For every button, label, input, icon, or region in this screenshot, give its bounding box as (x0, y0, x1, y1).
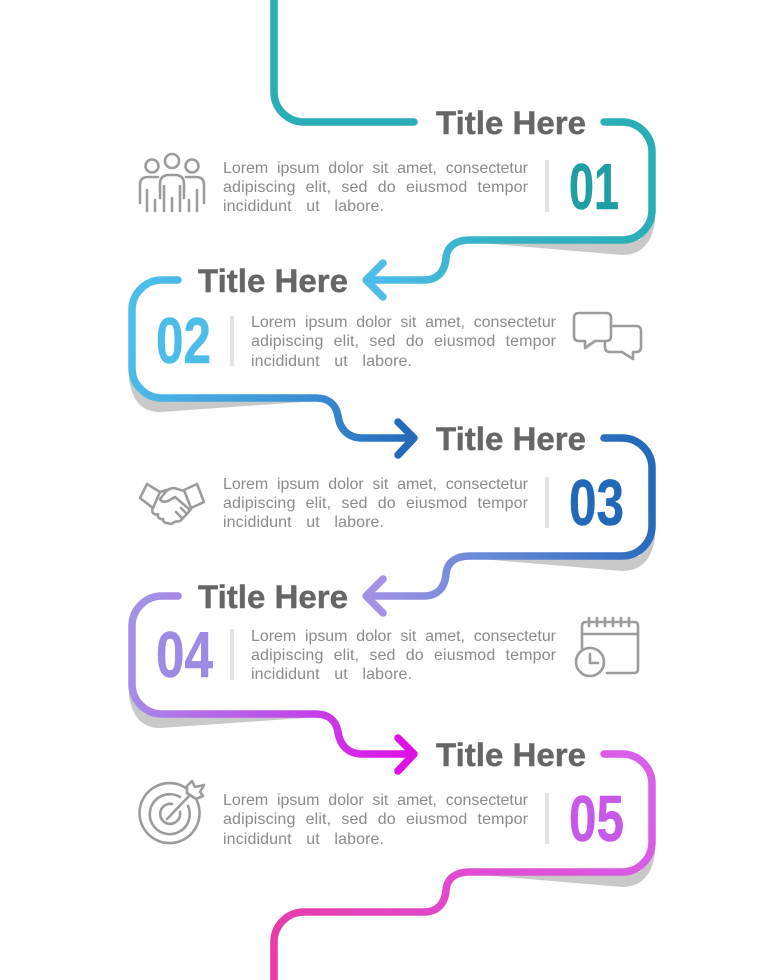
heading 03: Title Here (436, 421, 586, 457)
text block 04: incididunt ut labore. (251, 666, 412, 683)
text block 02: adipiscing elit, sed do eiusmod tempor (251, 333, 557, 350)
text block 03: incididunt ut labore. (223, 514, 384, 531)
number 03: 03 (569, 466, 624, 539)
number 02: 02 (156, 304, 211, 377)
panel: step 02 (129, 263, 641, 455)
icon: target with arrow (140, 781, 204, 843)
divider 05 (545, 793, 549, 844)
icon: chat bubbles (574, 313, 641, 359)
divider 04 (230, 629, 234, 680)
icon: calendar and clock (576, 618, 638, 676)
frame and arrow 01 (366, 122, 652, 297)
number 05: 05 (569, 782, 624, 855)
text block 05: incididunt ut labore. (223, 831, 384, 848)
frame and arrow 04 (132, 596, 414, 771)
text block 05 (223, 792, 529, 848)
divider 02 (230, 316, 234, 366)
number 01: 01 (569, 150, 619, 223)
text block 04 (251, 628, 557, 683)
text block 02: Lorem ipsum dolor sit amet, consectetur (251, 314, 557, 331)
panel: step 04 (129, 579, 638, 771)
shadow 02 (129, 360, 318, 412)
heading 05: Title Here (436, 737, 586, 773)
top connector line (274, 0, 414, 122)
text block 03: Lorem ipsum dolor sit amet, consectetur (223, 476, 529, 493)
text block 04: adipiscing elit, sed do eiusmod tempor (251, 647, 557, 664)
heading 01: Title Here (436, 105, 586, 141)
icon: handshake (140, 484, 204, 524)
text block 05: adipiscing elit, sed do eiusmod tempor (223, 811, 529, 828)
text block 03: adipiscing elit, sed do eiusmod tempor (223, 495, 529, 512)
divider 03 (545, 477, 549, 528)
heading 04: Title Here (198, 579, 348, 615)
text block 01: Lorem ipsum dolor sit amet, consectetur (223, 160, 529, 177)
heading 02: Title Here (198, 263, 348, 299)
divider 01 (545, 160, 549, 212)
shadow 04 (129, 676, 318, 728)
panel: step 05 (140, 737, 655, 980)
shadow 01 (470, 205, 655, 255)
text block 01: incididunt ut labore. (223, 198, 384, 215)
icon: team (140, 154, 204, 211)
shadow 05 (470, 837, 655, 887)
text block 05: Lorem ipsum dolor sit amet, consectetur (223, 792, 529, 809)
text block 01: adipiscing elit, sed do eiusmod tempor (223, 179, 529, 196)
frame and arrow 02 (132, 280, 414, 455)
frame and arrow 05 (274, 754, 652, 980)
text block 04: Lorem ipsum dolor sit amet, consectetur (251, 628, 557, 645)
text block 03 (223, 476, 529, 531)
number 04: 04 (156, 618, 213, 691)
panel: step 03 (140, 421, 655, 613)
text block 02 (251, 314, 557, 370)
frame and arrow 03 (366, 438, 652, 613)
panel: step 01 (140, 105, 655, 297)
text block 01 (223, 160, 529, 215)
text block 02: incididunt ut labore. (251, 353, 412, 370)
shadow 03 (470, 521, 655, 571)
